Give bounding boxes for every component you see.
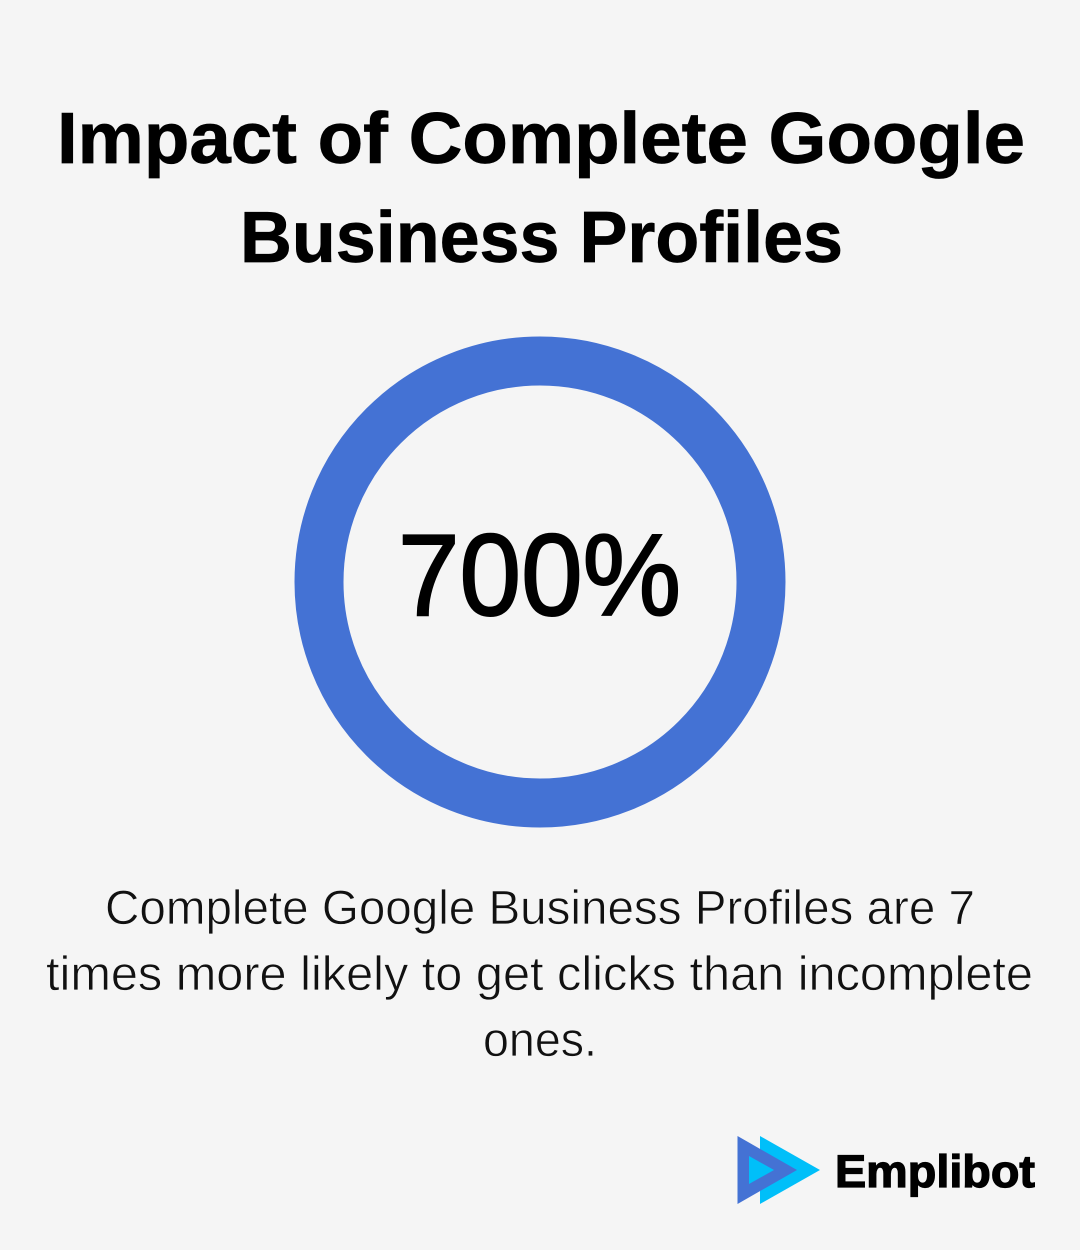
ring chart	[319, 361, 761, 803]
description text	[46, 882, 1033, 1067]
description text: Complete Google Business Profiles are 7	[105, 882, 975, 935]
logo: Emplibot: Emplibot	[835, 1146, 1035, 1197]
title: Business Profiles	[240, 198, 843, 278]
description text: times more likely to get clicks than incomplete	[46, 948, 1033, 1001]
value: 700%: 700%	[398, 510, 681, 640]
title	[57, 99, 1025, 278]
logo: Emplibot	[738, 1136, 1035, 1204]
description text: ones.	[483, 1014, 597, 1067]
title: Impact of Complete Google	[57, 99, 1025, 179]
